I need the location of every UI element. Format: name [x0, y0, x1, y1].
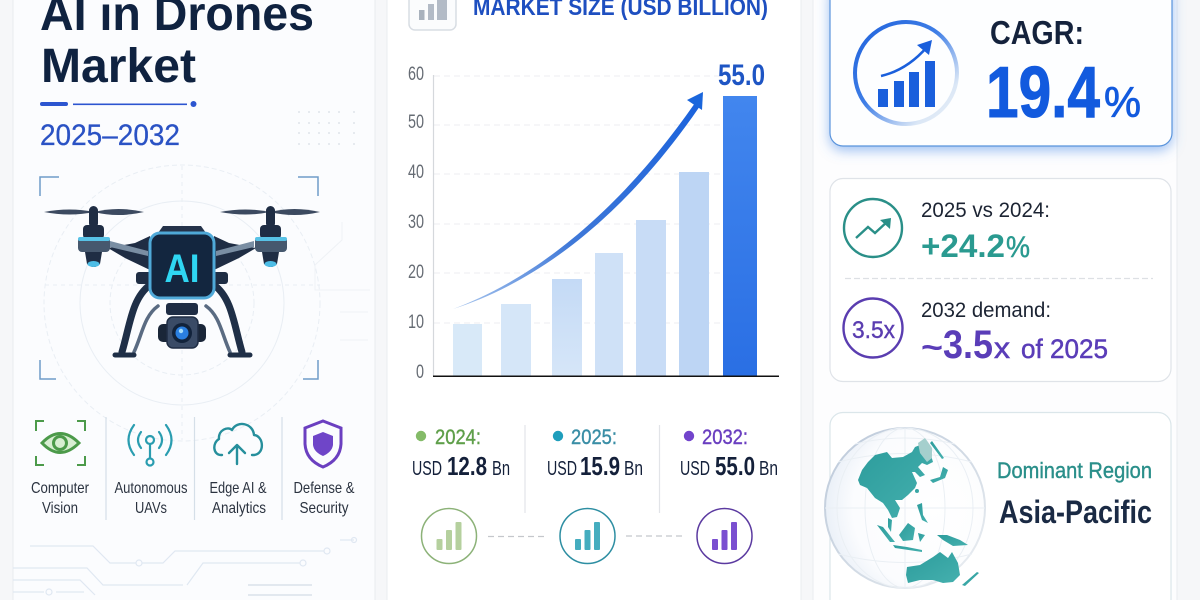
- feature: defense and security: Security: [300, 500, 348, 517]
- y axis labels: 0: [416, 362, 424, 383]
- value: 3.5x of 2025: [921, 323, 1108, 367]
- card: CAGR: [830, 0, 1172, 146]
- feature: edge AI and analytics: Analytics: [212, 500, 266, 517]
- card: growth stats: 2032 demand:: [921, 299, 1051, 322]
- value label: 55.0: [718, 59, 765, 92]
- title: Market: [41, 40, 196, 93]
- icon: signal beacon: [128, 425, 172, 466]
- stat: 2032: USD: [680, 458, 710, 480]
- stat: 2025: 2025:: [571, 426, 617, 449]
- bars: [453, 324, 482, 376]
- card: dominant region: Asia-Pacific: [999, 494, 1152, 530]
- card: growth stats: 2025 vs 2024:: [921, 199, 1050, 222]
- panel: market size chart: [387, 0, 801, 600]
- feature: computer vision: [31, 421, 90, 517]
- feature: computer vision: Vision: [42, 500, 78, 517]
- panel: left overview: [13, 0, 375, 600]
- card: dominant region: [825, 412, 1171, 600]
- icon: 3.5x circle: 3.5x: [852, 317, 895, 344]
- feature: defense and security: [294, 421, 355, 517]
- motors: [89, 206, 98, 228]
- growth arrow: [453, 92, 703, 309]
- decorative dots: [298, 111, 355, 145]
- stat: 2024: USD: [412, 458, 442, 480]
- stat: 2032: Bn: [759, 458, 778, 480]
- label: AI chip: AI: [164, 247, 200, 291]
- title: [40, 0, 314, 93]
- icon: shield: [305, 421, 341, 467]
- body: [158, 226, 206, 233]
- icon: purple bars circle: [697, 508, 752, 564]
- stat: 2024: [412, 426, 510, 481]
- feature: autonomous UAVs: Autonomous: [114, 480, 188, 497]
- stat: 2025: Bn: [624, 458, 643, 480]
- icon: teal bars circle: [560, 508, 615, 564]
- stat: 2024: 12.8: [447, 451, 487, 481]
- y axis labels: 20: [408, 262, 424, 283]
- stat: 2032: [680, 426, 778, 481]
- grid lines: [434, 76, 720, 323]
- stat: 2032: 2032:: [702, 426, 748, 449]
- feature: edge AI and analytics: [210, 424, 267, 517]
- decorative radar rings: [44, 165, 370, 441]
- subtitle: years: 2025–2032: [40, 119, 180, 152]
- value: 3.5x of 2025: 3.5: [943, 323, 993, 367]
- propellers: [44, 210, 94, 214]
- y axis labels: 40: [408, 162, 424, 183]
- feature: defense and security: Defense &: [294, 480, 355, 497]
- title rule: [40, 101, 196, 107]
- icon: globe: [825, 428, 985, 588]
- icon: eye in viewfinder: [36, 421, 85, 465]
- y axis labels: 50: [408, 112, 424, 133]
- y axis labels: [408, 64, 424, 383]
- y axis labels: 10: [408, 312, 424, 333]
- icon: green bars circle: [422, 508, 476, 564]
- stat: 2025: USD: [547, 458, 577, 480]
- stat: 2032: 55.0: [715, 451, 755, 481]
- icon: chart badge: [409, 0, 456, 30]
- feature dividers: [106, 417, 282, 520]
- stat dividers: [525, 425, 660, 513]
- card: growth stats: %: [1006, 231, 1030, 264]
- feature: edge AI and analytics: Edge AI &: [210, 480, 267, 497]
- card: dominant region: Dominant Region: [997, 458, 1152, 483]
- panel: key metrics: [813, 0, 1177, 600]
- card: growth stats: [830, 178, 1171, 382]
- value: 3.5x of 2025: x: [994, 332, 1010, 365]
- stat: 2025: [547, 426, 643, 481]
- card: CAGR: 19.4: [986, 53, 1100, 133]
- icon: cloud upload: [214, 424, 262, 464]
- connector dashes: [488, 535, 686, 538]
- y axis labels: 30: [408, 212, 424, 233]
- feature: autonomous UAVs: [114, 425, 188, 517]
- card: CAGR: CAGR:: [990, 14, 1084, 51]
- arms: [108, 236, 150, 270]
- icon: growth ring: [855, 22, 957, 124]
- value: 3.5x of 2025: of 2025: [1021, 334, 1108, 364]
- decorative circuit lines: [13, 538, 356, 595]
- icon: AI drone: [44, 206, 320, 355]
- stat: 2024: 2024:: [435, 426, 481, 449]
- feature: computer vision: Computer: [31, 480, 90, 497]
- card: CAGR: %: [1104, 79, 1141, 127]
- icon: 3.5x circle: [844, 298, 902, 358]
- gimbal and camera: [166, 303, 198, 315]
- icon: trend circle: [844, 199, 902, 257]
- card: growth stats: +24.2: [921, 228, 1005, 264]
- viewfinder brackets: [40, 177, 318, 379]
- map: Asia-Pacific landmass: [858, 438, 979, 586]
- legs: [115, 285, 250, 355]
- value: 3.5x of 2025: ~: [921, 329, 943, 365]
- feature: autonomous UAVs: UAVs: [135, 500, 167, 517]
- stat: 2025: 15.9: [580, 451, 620, 481]
- bar chart: [408, 59, 779, 383]
- stat: 2024: Bn: [492, 458, 510, 480]
- y axis labels: 60: [408, 64, 424, 85]
